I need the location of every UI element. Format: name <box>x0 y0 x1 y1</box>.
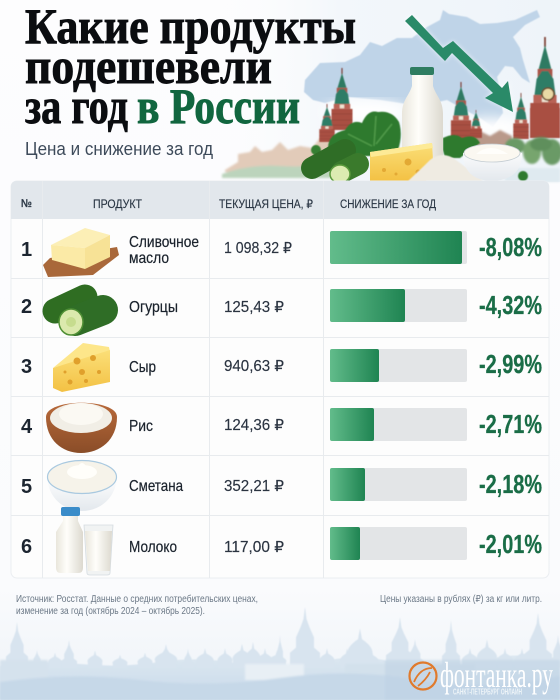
kremlin towers <box>319 37 560 142</box>
source note <box>16 594 258 617</box>
header: product: ПРОДУКТ <box>93 199 142 211</box>
arrow: price decline <box>405 15 513 112</box>
subtitle: Цена и снижение за год <box>25 139 213 159</box>
row 5: sour cream: -2,18% <box>479 469 542 499</box>
title: подешевели <box>25 38 272 94</box>
table header <box>11 181 549 219</box>
icon: sour cream bowl <box>47 460 117 511</box>
row 5: sour cream: 5 <box>21 476 32 498</box>
row 4: rice <box>21 403 542 453</box>
row 2: cucumbers <box>21 289 542 335</box>
row 2: cucumbers: Огурцы <box>129 299 178 316</box>
header: decline: СНИЖЕНИЕ ЗА ГОД <box>340 199 436 211</box>
row 3: cheese: Сыр <box>129 359 156 376</box>
row 6: milk <box>21 507 542 575</box>
footer skyline <box>0 607 560 700</box>
hero illustration <box>220 0 560 183</box>
sky <box>220 0 560 182</box>
title: в России <box>137 78 300 134</box>
row 4: rice: -2,71% <box>479 409 542 439</box>
row 5: sour cream: Сметана <box>129 478 183 495</box>
header: current price: ТЕКУЩАЯ ЦЕНА, ₽ <box>219 199 313 211</box>
trees and water <box>505 137 560 182</box>
title <box>25 0 356 134</box>
table panel <box>11 181 549 578</box>
row 1: butter: масло <box>129 250 169 267</box>
row 2: cucumbers: 125,43 ₽ <box>224 299 284 316</box>
row 1: butter: Сливочное <box>129 234 199 251</box>
icon: butter <box>43 228 119 277</box>
sour cream bowl <box>463 148 522 181</box>
row 4: rice: 124,36 ₽ <box>224 417 284 434</box>
source note: Источник: Росстат. Данные о средних потребительских ценах, <box>16 594 258 605</box>
distant city <box>222 130 512 178</box>
row 6: milk: 6 <box>21 536 32 558</box>
icon: rice bowl <box>46 403 117 453</box>
row 2: cucumbers: 2 <box>21 296 32 318</box>
header: number: № <box>21 198 32 210</box>
row 1: butter: 1 <box>21 239 32 261</box>
row 6: milk: Молоко <box>129 539 177 556</box>
row 5: sour cream: 352,21 ₽ <box>224 478 284 495</box>
rice pile <box>408 155 483 181</box>
row 5: sour cream <box>21 460 542 511</box>
clouds <box>323 101 526 138</box>
milk bottle <box>402 74 443 160</box>
icon: milk bottle and glass <box>56 507 113 575</box>
row 1: butter: -8,08% <box>479 232 542 262</box>
row 3: cheese: 3 <box>21 356 32 378</box>
table <box>11 181 549 578</box>
row 1: butter <box>21 228 542 277</box>
row 3: cheese: 940,63 ₽ <box>224 358 284 375</box>
cheese wedge <box>370 143 433 181</box>
row 4: rice: 4 <box>21 416 33 438</box>
map of Russia <box>304 10 540 127</box>
parsley <box>311 111 528 181</box>
row 2: cucumbers: -4,32% <box>479 290 542 320</box>
icon: cheese <box>53 343 110 392</box>
row 6: milk: -2,01% <box>479 529 542 559</box>
row 4: rice: Рис <box>129 418 153 435</box>
icon: logo emblem <box>410 662 436 690</box>
row 3: cheese <box>21 343 542 392</box>
row 1: butter: 1 098,32 ₽ <box>224 240 292 257</box>
title: за год <box>25 78 128 134</box>
row 6: milk: 117,00 ₽ <box>224 539 284 556</box>
cucumbers <box>312 150 345 168</box>
source note: изменение за год (октябрь 2024 – октябрь 2025). <box>16 606 205 617</box>
row 3: cheese: -2,99% <box>479 349 542 379</box>
icon: cucumbers <box>55 297 103 335</box>
